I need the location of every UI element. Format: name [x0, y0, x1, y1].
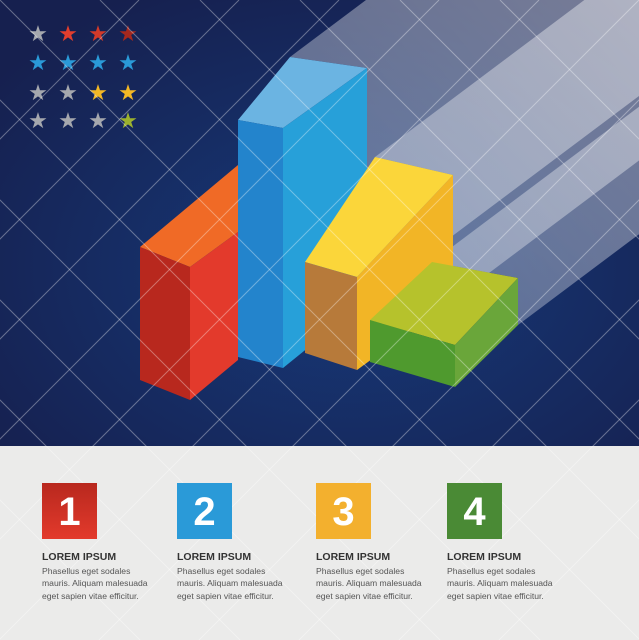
- card 4 text: [447, 551, 553, 601]
- chart illustration panel: [0, 0, 639, 446]
- rating stars: ★: [28, 22, 48, 47]
- card 3: [316, 483, 422, 601]
- card 2 text: eget sapien vitae efficitur.: [177, 591, 274, 601]
- card 3 text: LOREM IPSUM: [316, 551, 390, 563]
- card 4 text: eget sapien vitae efficitur.: [447, 591, 544, 601]
- number box 3: [316, 483, 371, 539]
- card 2 text: mauris. Aliquam malesuada: [177, 578, 283, 588]
- rating stars: [28, 22, 138, 134]
- card 4 text: LOREM IPSUM: [447, 551, 521, 563]
- number box 4: 4: [463, 490, 486, 534]
- card 4 text: Phasellus eget sodales: [447, 566, 535, 576]
- rating stars: ★: [88, 109, 108, 134]
- number box 1: [42, 483, 97, 539]
- rating stars: ★: [28, 51, 48, 76]
- card 3 text: Phasellus eget sodales: [316, 566, 404, 576]
- number box 4: [447, 483, 502, 539]
- light beams: [290, 0, 639, 325]
- rating stars: ★: [58, 109, 78, 134]
- card 2: [177, 483, 283, 601]
- card 1 text: eget sapien vitae efficitur.: [42, 591, 139, 601]
- rating stars: ★: [118, 109, 138, 134]
- card 2 text: [177, 551, 283, 601]
- rating stars: ★: [88, 22, 108, 47]
- number box 2: [177, 483, 232, 539]
- rating stars: ★: [118, 51, 138, 76]
- rating stars: ★: [28, 109, 48, 134]
- rating stars: ★: [58, 81, 78, 106]
- rating stars: ★: [118, 22, 138, 47]
- card 4 text: mauris. Aliquam malesuada: [447, 578, 553, 588]
- card 1 text: mauris. Aliquam malesuada: [42, 578, 148, 588]
- card 3 text: eget sapien vitae efficitur.: [316, 591, 413, 601]
- rating stars: ★: [28, 81, 48, 106]
- rating stars: ★: [58, 51, 78, 76]
- bar: green: [370, 262, 518, 387]
- rating stars: ★: [118, 81, 138, 106]
- card 4: [447, 483, 553, 601]
- rating stars: ★: [88, 81, 108, 106]
- card 2 text: Phasellus eget sodales: [177, 566, 265, 576]
- card 1: [42, 483, 148, 601]
- card 3 text: [316, 551, 422, 601]
- number box 3: 3: [332, 490, 355, 534]
- rating stars: ★: [58, 22, 78, 47]
- card 1 text: Phasellus eget sodales: [42, 566, 130, 576]
- number box 1: 1: [58, 490, 81, 534]
- bar: yellow: [305, 157, 453, 370]
- card 2 text: LOREM IPSUM: [177, 551, 251, 563]
- number box 2: 2: [193, 490, 216, 534]
- card 3 text: mauris. Aliquam malesuada: [316, 578, 422, 588]
- bar: red: [140, 165, 238, 400]
- rating stars: ★: [88, 51, 108, 76]
- card 1 text: [42, 551, 148, 601]
- bar: blue: [238, 57, 367, 368]
- card 1 text: LOREM IPSUM: [42, 551, 116, 563]
